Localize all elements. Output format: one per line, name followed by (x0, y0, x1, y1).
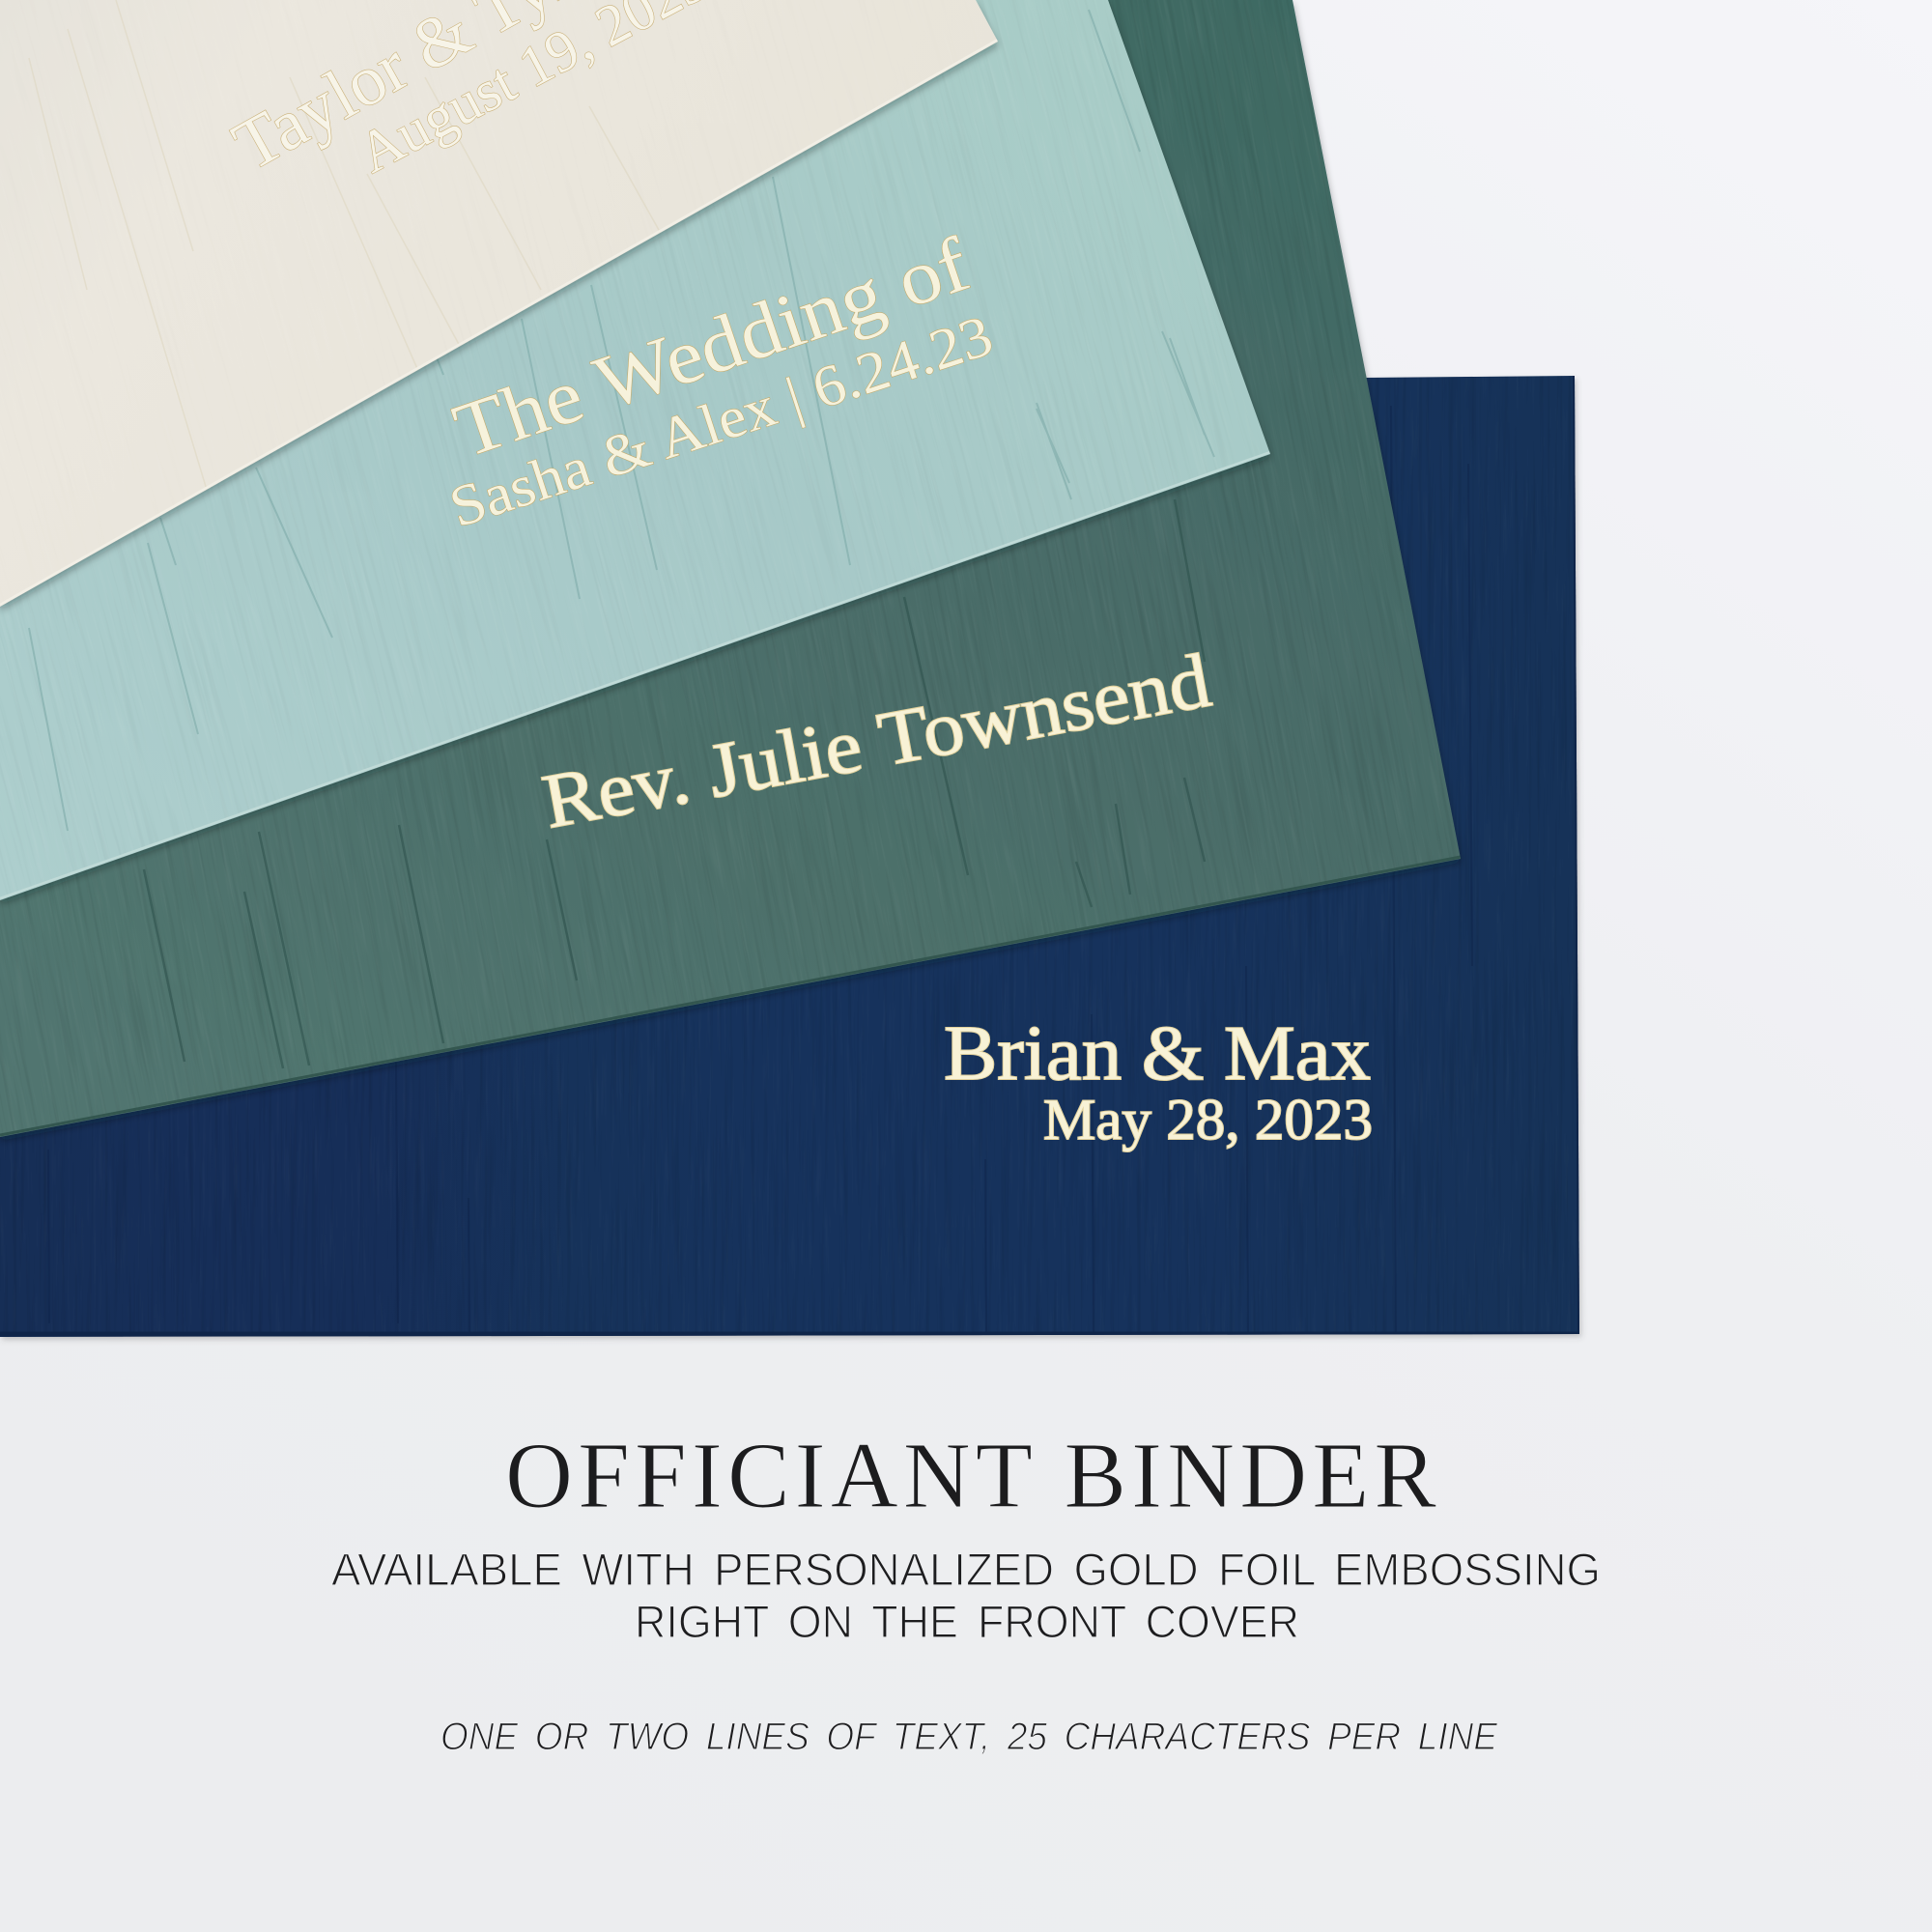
note: text limits: ONE OR TWO LINES OF TEXT, 25 CHARACTERS PER LINE (440, 1716, 1498, 1758)
panel: dark green binder cover (0, 0, 1462, 1142)
subtitle text block (331, 1544, 1601, 1647)
green cover text: Rev. Julie Townsend (536, 639, 1217, 845)
navy cover text: Brian & Max (944, 1011, 1371, 1096)
navy cover text (944, 1011, 1373, 1151)
navy cover text: May 28, 2023 (1043, 1088, 1373, 1151)
subtitle text block: RIGHT ON THE FRONT COVER (635, 1596, 1299, 1647)
teal cover text: Sasha & Alex | 6.24.23 (442, 303, 1000, 539)
subtitle text block: AVAILABLE WITH PERSONALIZED GOLD FOIL EMBOSSING (331, 1544, 1601, 1595)
teal cover text (442, 222, 1000, 539)
title: OFFICIANT BINDER (505, 1424, 1436, 1527)
panel: cream binder cover (0, 0, 1001, 612)
panel: navy binder cover (0, 367, 1584, 1343)
panel: light teal binder cover (0, 0, 1271, 905)
teal cover text: The Wedding of (444, 222, 980, 474)
